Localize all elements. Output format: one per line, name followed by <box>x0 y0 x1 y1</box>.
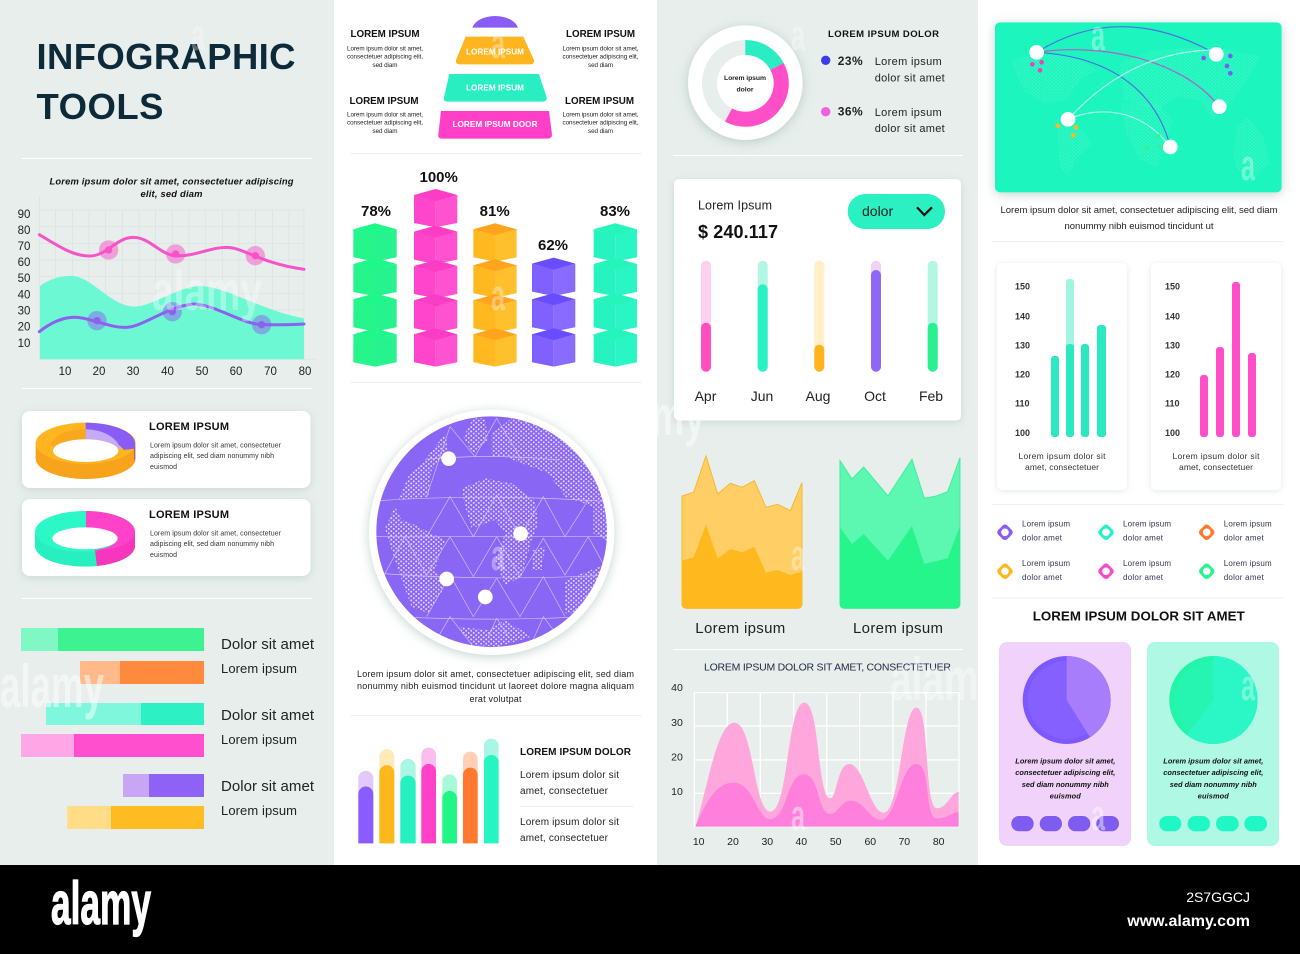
y labels <box>1015 282 1030 438</box>
card text <box>149 509 282 559</box>
icon: teal ring <box>35 511 135 567</box>
column 3 background <box>657 0 978 865</box>
title: TOOLS <box>36 86 164 127</box>
column 1 background <box>0 0 334 865</box>
x axis labels: 40 <box>161 366 174 378</box>
area chart labels: Lorem ipsum <box>695 620 785 637</box>
y labels: 140 <box>1165 312 1180 322</box>
percent labels: 62% <box>538 237 568 254</box>
y axis labels: 80 <box>18 225 30 237</box>
card text: adipiscing elit, sed diam nonummy nibh <box>150 541 274 548</box>
bar: purple: Dolor sit amet <box>221 778 315 795</box>
donut centre label: dolor <box>736 86 754 94</box>
y labels: 110 <box>1165 398 1180 408</box>
bar: teal: Dolor sit amet <box>221 707 315 724</box>
watermarks: a <box>1091 11 1105 60</box>
text: lower right: consectetuer adipiscing elit, <box>562 120 639 127</box>
text: top right: LOREM IPSUM <box>566 29 635 40</box>
text: top right: consectetuer adipiscing elit, <box>562 54 639 61</box>
heading: pie section: LOREM IPSUM DOLOR SIT AMET <box>1033 609 1245 624</box>
text: top left <box>347 29 423 69</box>
text: lower left <box>347 96 423 135</box>
globe caption: Lorem ipsum dolor sit amet, consectetuer adipiscing elit, sed diam <box>357 669 634 679</box>
legend labels: dolor amet <box>1123 573 1164 582</box>
card text: LOREM IPSUM <box>149 421 229 433</box>
watermarks: a <box>1241 141 1255 190</box>
pyramid labels: LOREM IPSUM <box>466 48 524 56</box>
bar: teal <box>46 703 315 725</box>
y labels: 120 <box>1165 370 1180 380</box>
bar chart notes <box>520 747 634 844</box>
globe caption: nonummy nibh euismod tincidunt ut laoreet dolore magna aliquam <box>357 681 634 691</box>
wave x axis: 30 <box>761 836 773 848</box>
percent labels: 78% <box>361 203 391 220</box>
pyramid shapes <box>438 16 552 139</box>
caption <box>1172 451 1260 472</box>
card: teal and pink ring <box>22 499 310 576</box>
month labels: Aug <box>806 388 830 404</box>
wave y axis: 30 <box>671 717 683 729</box>
x axis labels: 20 <box>93 366 105 378</box>
world map <box>995 22 1282 192</box>
footer url: www.alamy.com <box>1126 913 1250 930</box>
text: top left: LOREM IPSUM <box>350 29 420 40</box>
watermarks: lamy <box>620 384 705 447</box>
footer image id: 2S7GGCJ <box>1186 889 1250 905</box>
y labels: 140 <box>1015 312 1030 322</box>
x axis labels: 60 <box>230 366 242 378</box>
donut legend: dolor sit amet <box>875 72 945 84</box>
purple pie <box>1023 656 1111 744</box>
y axis labels: 90 <box>18 209 30 221</box>
pills <box>1011 816 1119 831</box>
watermarks: a <box>491 19 505 68</box>
bar: yellow <box>67 803 297 829</box>
text: lower left: sed diam <box>372 128 398 135</box>
map small dots <box>1030 54 1233 150</box>
y labels: 100 <box>1015 428 1030 438</box>
legend icons <box>996 523 1216 580</box>
panel text: euismod <box>1050 792 1081 801</box>
month labels: Oct <box>864 388 886 404</box>
watermarks: alamy <box>0 653 104 720</box>
y labels <box>1165 282 1180 438</box>
footer bar <box>0 865 1300 954</box>
amount: Lorem Ipsum <box>698 198 772 212</box>
wave y axis: 10 <box>671 786 683 798</box>
chart caption: elit, sed diam <box>140 188 202 199</box>
watermarks: a <box>491 271 505 320</box>
wave x axis: 40 <box>795 836 807 848</box>
caption: amet, consectetuer <box>1179 462 1253 472</box>
text: lower left: consectetuer adipiscing elit, <box>347 120 423 127</box>
amount: $ 240.117 <box>698 222 778 242</box>
cube bar chart <box>353 169 637 367</box>
title <box>36 36 296 127</box>
yellow area chart <box>682 456 802 608</box>
map nodes <box>1029 45 1227 154</box>
bar chart notes: Lorem ipsum dolor sit <box>520 817 619 828</box>
text: top right: Lorem ipsum dolor sit amet, <box>562 45 639 52</box>
month labels: Jun <box>751 388 773 404</box>
map caption: Lorem ipsum dolor sit amet, consectetuer adipiscing elit, sed diam <box>1000 205 1278 216</box>
card text: LOREM IPSUM <box>149 509 229 521</box>
wave x axis: 50 <box>830 836 842 848</box>
wave x axis: 80 <box>933 836 945 848</box>
pills <box>1159 816 1267 831</box>
panel text: Lorem ipsum dolor sit amet, <box>1163 756 1263 765</box>
bar: orange <box>80 661 297 684</box>
percent labels: 81% <box>480 203 510 220</box>
pyramid: LOREM IPSUM DOOR <box>452 120 538 129</box>
panel: purple pie <box>999 642 1131 846</box>
legend labels: Lorem ipsum <box>1022 559 1070 568</box>
bar: green: Dolor sit amet <box>221 636 315 653</box>
card: teal bar chart <box>997 263 1127 490</box>
card text: adipiscing elit, sed diam nonummy nibh <box>150 453 274 460</box>
y labels: 150 <box>1015 282 1030 292</box>
watermarks: a <box>1241 661 1255 710</box>
area chart labels: Lorem ipsum <box>853 620 943 637</box>
teal pie <box>1169 656 1258 744</box>
map caption: nonummy nibh euismod tincidunt ut <box>1064 221 1214 232</box>
x axis labels: 10 <box>59 366 71 378</box>
wave plot <box>694 693 959 827</box>
bar chart notes: amet, consectetuer <box>520 786 609 797</box>
watermarks: a <box>791 531 805 580</box>
card: orange and purple ring <box>22 411 310 488</box>
footer logo: alamy <box>51 870 151 937</box>
dropdown <box>848 194 945 229</box>
y axis labels: 10 <box>18 338 30 350</box>
rounded bar chart <box>358 739 499 843</box>
legend labels: dolor amet <box>1224 534 1264 543</box>
bar: green <box>21 628 315 653</box>
legend labels: Lorem ipsum <box>1123 559 1171 568</box>
panel text: euismod <box>1198 792 1229 801</box>
y axis labels: 60 <box>18 257 30 269</box>
donut centre label: Lorem ipsum <box>724 75 766 82</box>
cube columns <box>353 189 637 367</box>
x axis labels: 50 <box>196 366 208 378</box>
bar: orange: Lorem ipsum <box>221 661 297 676</box>
donut centre label <box>724 75 766 94</box>
text: top left: Lorem ipsum dolor sit amet, <box>347 45 423 52</box>
legend labels: Lorem ipsum <box>1224 520 1272 529</box>
pyramid: LOREM IPSUM <box>466 84 524 92</box>
pink bars <box>1200 282 1256 437</box>
wave x axis <box>693 836 945 848</box>
donut legend: 23% <box>838 54 863 68</box>
wave y axis <box>671 682 683 798</box>
donut legend: 36% <box>838 104 863 118</box>
pink wave chart <box>671 662 959 848</box>
text: top left: sed diam <box>372 62 398 69</box>
panel text: sed diam nonummy nibh <box>1170 780 1257 789</box>
panel text <box>1163 756 1263 801</box>
panel text: sed diam nonummy nibh <box>1022 780 1109 789</box>
donut legend: Lorem ipsum <box>875 56 942 68</box>
month labels: Apr <box>695 388 717 404</box>
y labels: 110 <box>1015 398 1030 408</box>
pyramid <box>347 16 639 139</box>
caption: amet, consectetuer <box>1025 462 1099 472</box>
x axis labels: 70 <box>264 366 277 378</box>
percent labels: 100% <box>420 169 458 186</box>
percent labels <box>361 169 630 254</box>
panel text: consectetuer adipiscing elit, <box>1015 768 1115 777</box>
chart caption <box>50 176 294 199</box>
wave chart title: LOREM IPSUM DOLOR SIT AMET, CONSECTETUER <box>704 662 951 674</box>
text: lower right: LOREM IPSUM <box>565 96 634 107</box>
globe caption: erat volutpat <box>470 694 522 704</box>
card text: Lorem ipsum dolor sit amet, consectetuer <box>150 442 282 450</box>
caption: Lorem ipsum dolor sit <box>1172 451 1260 461</box>
text: lower right <box>562 96 639 135</box>
watermarks: a <box>1091 791 1105 840</box>
card text: euismod <box>150 464 177 471</box>
legend labels: Lorem ipsum <box>1123 520 1171 529</box>
dropdown: dolor <box>862 203 893 219</box>
text: top left: consectetuer adipiscing elit, <box>347 54 423 61</box>
y axis labels: 50 <box>18 273 30 285</box>
y axis labels: 30 <box>18 306 30 318</box>
title: INFOGRAPHIC <box>36 36 296 77</box>
legend labels <box>1022 520 1272 582</box>
chart plot <box>39 197 315 359</box>
bar chart notes: Lorem ipsum dolor sit <box>520 770 619 781</box>
donut legend: LOREM IPSUM DOLOR <box>828 29 939 40</box>
vertical bars <box>701 261 938 372</box>
donut legend: Lorem ipsum <box>875 107 942 119</box>
bar: yellow: Lorem ipsum <box>221 803 297 818</box>
wave x axis: 20 <box>727 836 739 848</box>
bar chart notes: amet, consectetuer <box>520 833 609 844</box>
y axis labels: 20 <box>18 322 30 334</box>
legend labels: dolor amet <box>1224 573 1264 582</box>
line and area chart <box>18 176 315 378</box>
y axis labels: 70 <box>18 241 30 253</box>
bar chart notes: LOREM IPSUM DOLOR <box>520 747 632 758</box>
map routes <box>1037 27 1219 147</box>
legend labels: dolor amet <box>1123 534 1164 543</box>
panel text <box>1015 756 1115 801</box>
donut chart <box>688 25 803 140</box>
month labels <box>695 388 943 404</box>
caption <box>1018 451 1106 472</box>
amount <box>698 198 778 242</box>
y axis labels <box>18 209 30 350</box>
card text: Lorem ipsum dolor sit amet, consectetuer <box>150 530 282 538</box>
horizontal bars <box>21 628 315 829</box>
text: lower right: sed diam <box>588 128 613 135</box>
x axis labels: 80 <box>299 366 311 378</box>
bar: pink <box>21 732 297 757</box>
watermarks: alamy <box>890 646 1000 713</box>
bar: purple <box>123 774 315 797</box>
wave x axis: 60 <box>864 836 876 848</box>
card: pink bar chart <box>1151 263 1281 490</box>
wave y axis: 20 <box>671 752 683 764</box>
globe rim <box>369 410 614 655</box>
panel text: Lorem ipsum dolor sit amet, <box>1015 756 1115 765</box>
watermarks: a <box>191 11 205 60</box>
legend labels: dolor amet <box>1022 534 1063 543</box>
text: lower left: LOREM IPSUM <box>350 96 418 107</box>
y labels: 130 <box>1015 340 1030 350</box>
bar: pink: Lorem ipsum <box>221 732 297 747</box>
watermarks: a <box>491 531 505 580</box>
text: top right <box>562 29 639 69</box>
y labels: 150 <box>1165 282 1180 292</box>
teal bars <box>1051 279 1106 437</box>
wave y axis: 40 <box>671 682 683 694</box>
diamond legend <box>996 520 1272 582</box>
x axis labels: 30 <box>127 366 139 378</box>
y labels: 120 <box>1015 370 1030 380</box>
card: monthly bars <box>674 179 961 420</box>
card text <box>149 421 282 471</box>
panel text: consectetuer adipiscing elit, <box>1163 768 1263 777</box>
map continents <box>1010 47 1270 177</box>
watermarks: a <box>791 791 805 840</box>
globe caption <box>357 669 634 704</box>
y labels: 100 <box>1165 428 1180 438</box>
watermarks: alamy <box>152 259 262 322</box>
text: top right: sed diam <box>588 62 613 69</box>
caption: Lorem ipsum dolor sit <box>1018 451 1106 461</box>
month labels: Feb <box>919 388 943 404</box>
legend labels: Lorem ipsum <box>1224 559 1272 568</box>
map caption <box>1000 205 1278 232</box>
globe face <box>376 416 607 647</box>
icon: orange ring <box>36 423 136 479</box>
area chart labels <box>695 620 943 637</box>
text: lower right: Lorem ipsum dolor sit amet, <box>562 111 639 118</box>
panel: teal pie <box>1147 642 1279 846</box>
text: lower left: Lorem ipsum dolor sit amet, <box>347 111 423 118</box>
globe <box>369 410 614 655</box>
globe land and mesh <box>375 418 608 647</box>
globe markers <box>439 451 528 604</box>
donut legend: dolor sit amet <box>875 123 945 135</box>
y labels: 130 <box>1165 340 1180 350</box>
card text: euismod <box>150 552 177 559</box>
y axis labels: 40 <box>18 290 30 302</box>
green area chart <box>840 458 960 608</box>
wave x axis: 10 <box>693 836 705 848</box>
chart caption: Lorem ipsum dolor sit amet, consectetuer adipiscing <box>50 176 294 186</box>
donut legend <box>821 29 945 135</box>
legend labels: Lorem ipsum <box>1022 520 1070 529</box>
percent labels: 83% <box>600 203 630 220</box>
wave x axis: 70 <box>898 836 910 848</box>
watermarks: a <box>791 11 805 60</box>
legend labels: dolor amet <box>1022 573 1063 582</box>
x axis labels <box>59 366 311 378</box>
